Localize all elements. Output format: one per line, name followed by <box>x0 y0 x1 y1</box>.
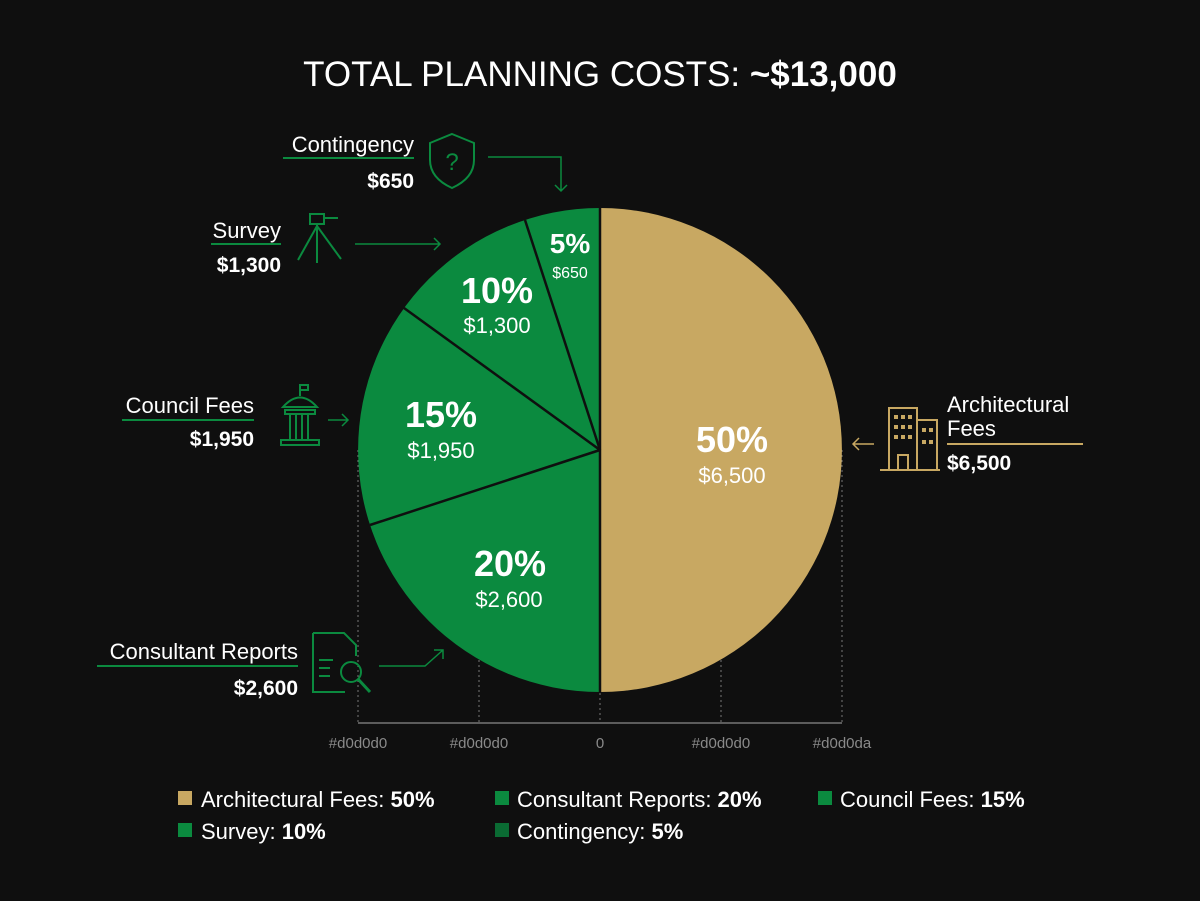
slice labels: 5% <box>550 228 590 259</box>
arrow <box>379 650 443 666</box>
callout: architectural fees: $6,500 <box>947 452 1011 475</box>
axis labels <box>329 735 872 752</box>
arrow <box>328 414 348 426</box>
icon: shield <box>430 134 474 188</box>
callout: architectural fees: Architectural <box>947 392 1069 417</box>
legend: Contingency: 5% <box>517 819 683 844</box>
callout: consultant reports <box>97 633 443 700</box>
slice labels <box>405 228 768 612</box>
icon: document with magnifier <box>313 633 370 692</box>
callout: contingency <box>283 132 567 193</box>
callout: consultant reports: Consultant Reports <box>110 639 298 664</box>
icon: government building <box>281 385 319 445</box>
legend: Council Fees: 15% <box>840 787 1025 812</box>
slice labels: 20% <box>474 543 546 584</box>
legend: Survey: 10% <box>201 819 326 844</box>
axis labels: #d0d0d0 <box>692 735 750 752</box>
slice labels: 10% <box>461 270 533 311</box>
arrow <box>488 157 567 191</box>
title: TOTAL PLANNING COSTS: ~$13,000 <box>303 55 897 94</box>
arrow <box>853 438 874 450</box>
slice labels: $1,300 <box>463 313 531 338</box>
callout: contingency: $650 <box>367 170 414 193</box>
icon: tripod <box>298 214 341 263</box>
callout: contingency: ? <box>445 149 459 176</box>
legend: Architectural Fees: 50% <box>201 787 435 812</box>
slice labels: 15% <box>405 394 477 435</box>
legend <box>178 787 1025 844</box>
arrow <box>355 238 440 250</box>
legend: Consultant Reports: 20% <box>517 787 762 812</box>
callout: survey <box>211 214 440 277</box>
axis labels: #d0d0d0 <box>329 735 387 752</box>
pie chart <box>358 208 842 692</box>
callout: survey: $1,300 <box>217 254 281 277</box>
axis labels: #d0d0da <box>813 735 872 752</box>
slice labels: $6,500 <box>698 463 766 488</box>
callout: consultant reports: $2,600 <box>234 677 298 700</box>
callout: architectural fees: Fees <box>947 416 996 441</box>
callout: survey: Survey <box>213 218 281 243</box>
callout: council fees: $1,950 <box>190 428 254 451</box>
slice labels: 50% <box>696 419 768 460</box>
icon: office building <box>880 408 940 470</box>
callout: architectural fees <box>853 392 1083 475</box>
axis with dotted guides <box>358 450 842 723</box>
callout: council fees: Council Fees <box>126 393 254 418</box>
axis labels: 0 <box>596 735 604 752</box>
slice labels: $650 <box>552 265 588 282</box>
callout: council fees <box>122 385 348 451</box>
axis labels: #d0d0d0 <box>450 735 508 752</box>
callout: contingency: Contingency <box>292 132 414 157</box>
slice labels: $2,600 <box>475 587 543 612</box>
slice labels: $1,950 <box>407 438 475 463</box>
